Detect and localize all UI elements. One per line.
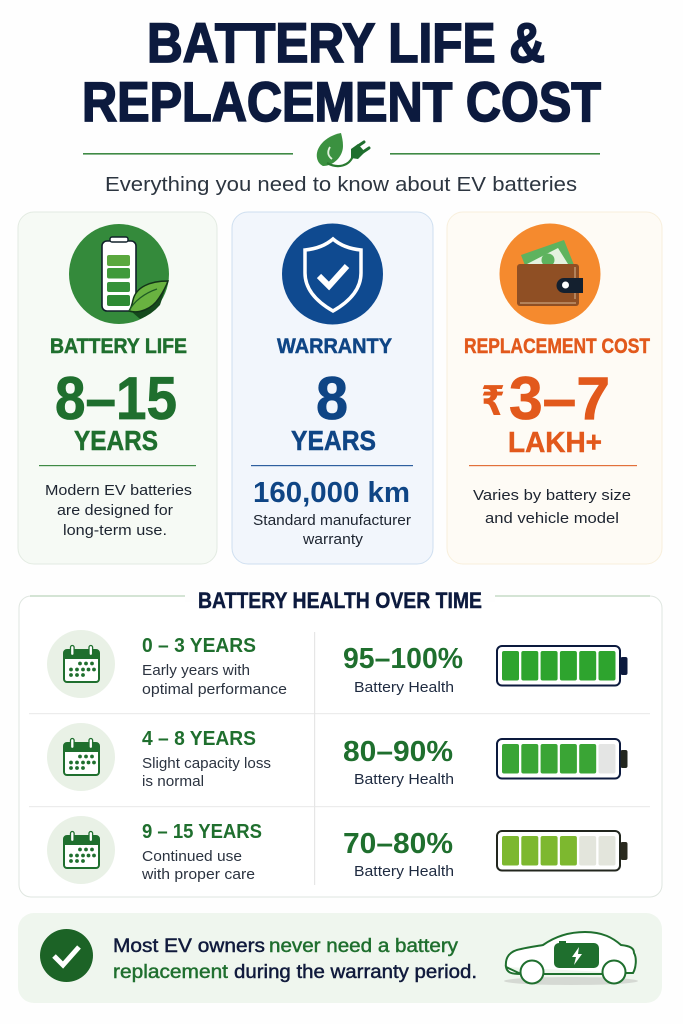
description [473,487,631,527]
period: 9 – 15 YEARS [142,821,262,843]
description: Modern EV batteries [45,482,192,499]
callout: warranty note [18,913,662,1003]
row: 9 to 15 years [47,816,628,884]
big number: 8 [316,365,348,432]
battery gauge: six of six [497,646,628,686]
callout text: Most EV owners [113,936,265,957]
description: Standard manufacturer [253,512,411,529]
title divider with leaf and plug icon [83,133,600,166]
description: are designed for [57,502,173,519]
icon: wallet with cash [500,224,600,324]
panel: battery health over time [19,588,662,897]
description: long-term use. [63,522,167,539]
heading: BATTERY LIFE [50,335,187,358]
icon: calendar [47,723,115,791]
period: 4 – 8 YEARS [142,728,256,750]
callout text: during the warranty period. [234,962,477,983]
panel: warranty [232,212,433,564]
icon: battery with leaf [69,224,169,324]
unit: YEARS [291,425,376,456]
heading: WARRANTY [277,335,392,358]
description [45,482,192,539]
battery gauge: four of six [497,831,628,870]
row: 0 to 3 years: Battery Health [354,679,454,696]
subtitle: Everything you need to know about EV batteries [105,173,577,196]
description: Continued use [142,848,242,865]
description: warranty [302,531,364,548]
description: and vehicle model [485,510,619,527]
row: 9 to 15 years: Battery Health [354,863,454,880]
distance: 160,000 km [253,477,410,509]
title: REPLACEMENT COST [82,70,601,133]
title [82,11,601,133]
description: optimal performance [142,681,287,698]
title: BATTERY LIFE & [147,11,545,74]
big number: 3–7 [509,365,610,432]
icon: check circle [40,929,93,982]
health value: 70–80% [343,828,453,860]
icon: shield with check [282,224,383,324]
callout text: never need a battery [269,936,459,957]
description [142,662,287,698]
row: 4 to 8 years [47,723,628,791]
panel: replacement cost [447,212,662,564]
description: is normal [142,773,204,790]
health value: 80–90% [343,736,453,768]
description: Varies by battery size [473,487,631,504]
unit: LAKH+ [508,427,602,459]
description: with proper care [141,866,255,883]
heading: REPLACEMENT COST [464,335,650,358]
description: Early years with [142,662,250,679]
unit: YEARS [74,425,158,456]
period: 0 – 3 YEARS [142,635,256,657]
description: Slight capacity loss [142,755,271,772]
big number: 8–15 [55,365,177,432]
health value: 95–100% [343,643,463,675]
description [142,755,271,790]
panel: battery life [18,212,217,564]
icon: electric car [504,932,638,985]
big number: ₹ [481,378,505,424]
icon: calendar [47,630,115,698]
heading: BATTERY HEALTH OVER TIME [198,588,482,613]
row: 4 to 8 years: Battery Health [354,771,454,788]
description [253,512,411,548]
battery gauge: five of six [497,739,628,778]
callout text: replacement [113,962,229,983]
icon: calendar [47,816,115,884]
description [141,848,255,883]
row: 0 to 3 years [47,630,628,698]
callout text [113,936,477,983]
